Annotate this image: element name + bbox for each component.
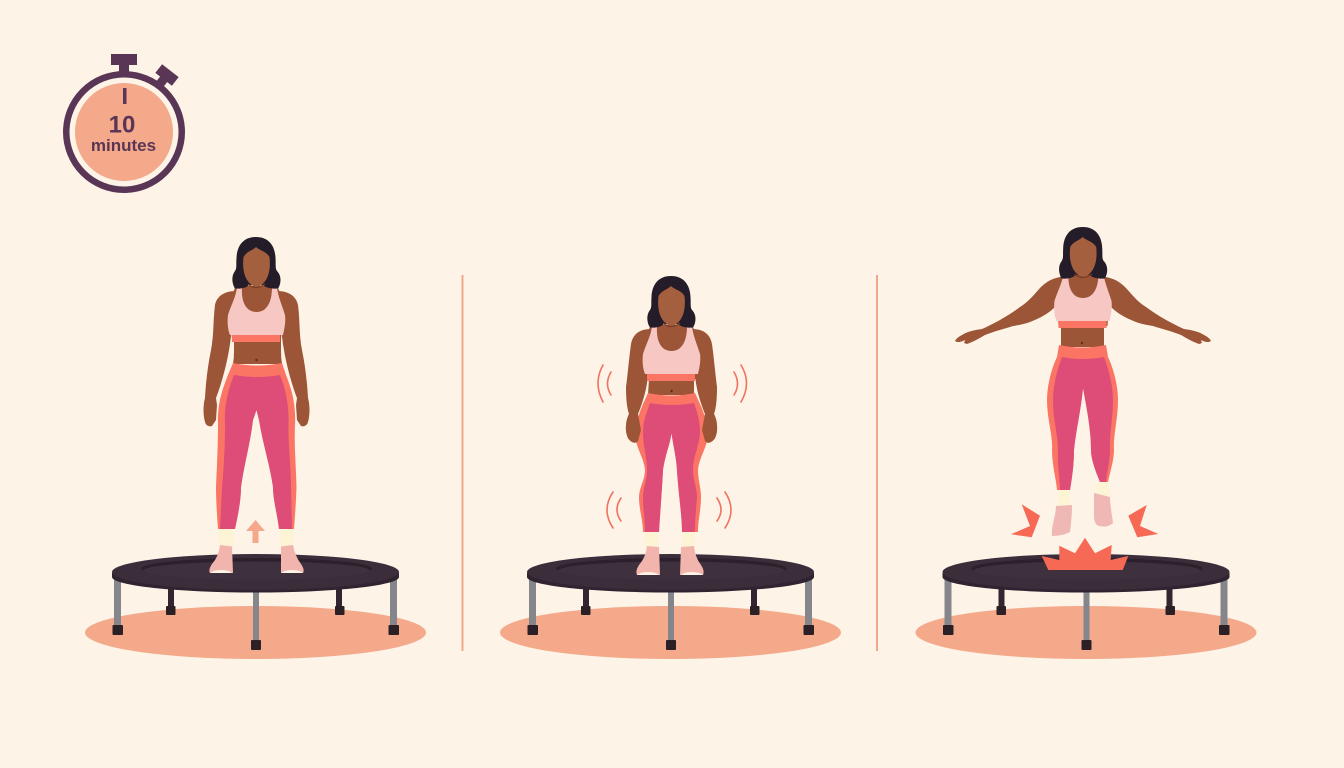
panel: step 3 jump <box>916 227 1256 659</box>
figure 1 standing <box>204 237 310 573</box>
panel: step 1 standing <box>85 237 426 659</box>
figure 2 bent knees <box>626 276 717 575</box>
trampoline 2 <box>500 554 841 659</box>
trampoline 1 <box>85 554 426 659</box>
divider lines <box>462 275 878 651</box>
arrow: up <box>246 520 265 543</box>
trampoline 3 <box>916 554 1256 659</box>
figure 3 jumping arms out <box>955 227 1211 536</box>
icon: stopwatch 10 minutes <box>66 54 182 190</box>
icon: stopwatch 10 minutes: minutes <box>91 136 156 155</box>
impact burst <box>1011 504 1158 570</box>
panel: step 2 squat <box>500 276 841 659</box>
icon: stopwatch 10 minutes: 10 <box>109 112 135 138</box>
vibration marks <box>598 365 746 528</box>
